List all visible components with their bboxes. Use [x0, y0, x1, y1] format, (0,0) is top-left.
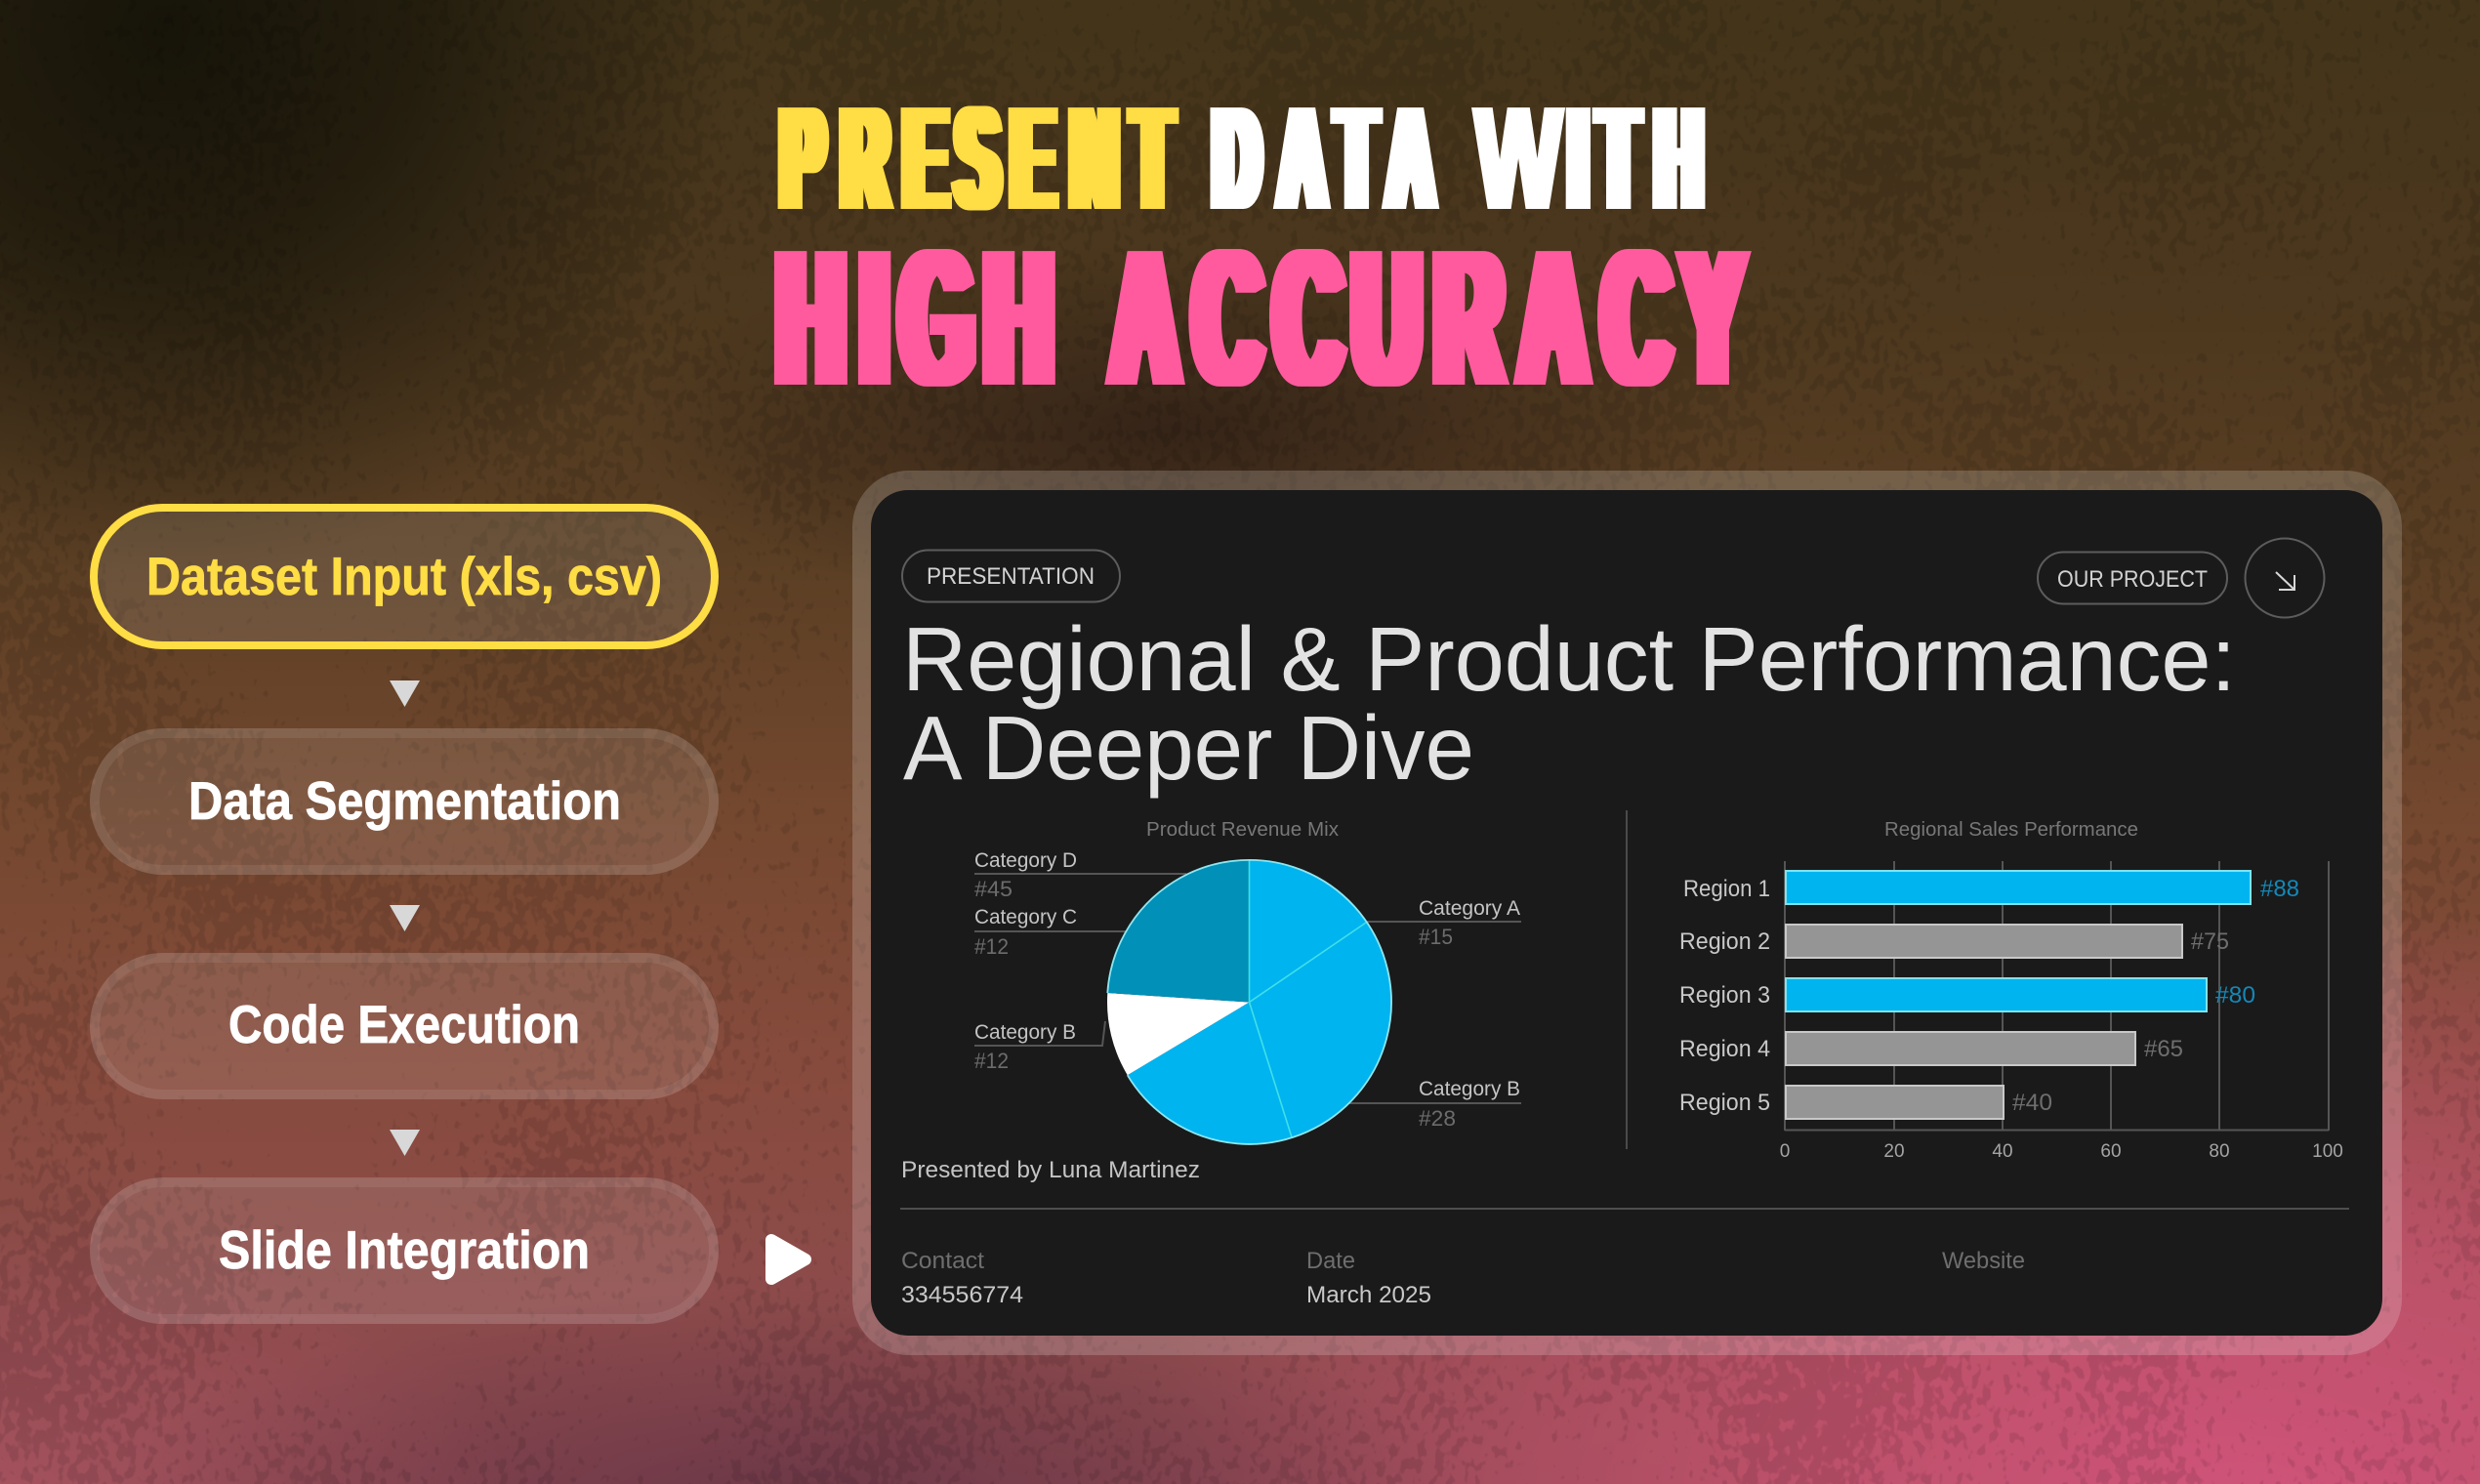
bar values: [2012, 876, 2299, 1116]
arrow down 1: [390, 680, 420, 707]
pie labels: Category A: [1419, 897, 1520, 920]
region labels: Region 2: [1679, 928, 1770, 955]
pie labels: #28: [1419, 1106, 1456, 1131]
x axis labels: 60: [2100, 1141, 2122, 1162]
bar chart grid: [1785, 861, 2329, 1131]
pie chart panel: [974, 819, 1521, 1144]
pie chart: [1107, 860, 1391, 1144]
pie labels: #12: [974, 934, 1009, 959]
icon: arrow in circle: [2246, 539, 2324, 617]
title line 2: ACCURACY: [1112, 209, 1743, 426]
footer: date: [1306, 1248, 1431, 1308]
pie labels: Category C: [974, 906, 1077, 928]
step 2: data segmentation: [95, 733, 714, 870]
step 1: dataset input: Dataset Input (xls, csv): [146, 546, 662, 606]
x axis labels: 100: [2312, 1141, 2343, 1162]
slide card frame: [852, 471, 2402, 1355]
footer: contact: [901, 1248, 1023, 1308]
slide heading: A Deeper Dive: [903, 697, 1474, 799]
bar chart title: Regional Sales Performance: [1884, 819, 2138, 841]
footer: date: March 2025: [1306, 1282, 1431, 1308]
x axis labels: 80: [2209, 1141, 2230, 1162]
pie labels: [974, 849, 1520, 1131]
pie labels: #45: [974, 877, 1013, 901]
footer: website: Website: [1942, 1248, 2025, 1274]
slide heading: Regional & Product Performance:: [902, 608, 2236, 710]
region labels: [1679, 876, 1770, 1116]
region labels: Region 5: [1679, 1090, 1770, 1116]
title: [778, 75, 1743, 426]
title line 1: DATA: [1214, 76, 1433, 240]
pie labels: #15: [1419, 925, 1453, 949]
bar values: #75: [2191, 928, 2229, 955]
title line 1: PRESENT: [781, 76, 1172, 240]
title line 2: [778, 209, 1743, 426]
bar chart panel: [1679, 819, 2343, 1162]
slide card: [871, 490, 2382, 1336]
x axis labels: 40: [1992, 1141, 2013, 1162]
step 2: data segmentation: Data Segmentation: [188, 770, 621, 831]
step 3: code execution: Code Execution: [228, 994, 580, 1054]
step 4: slide integration: Slide Integration: [219, 1219, 590, 1280]
slide heading: [902, 608, 2236, 799]
arrow down 3: [390, 1130, 420, 1156]
title line 1: [781, 75, 1702, 240]
workflow steps: [94, 508, 715, 1319]
bars: [1786, 871, 2251, 1119]
chart divider: [1626, 810, 1628, 1149]
arrow to slide: [771, 1240, 806, 1279]
arrow down 2: [390, 905, 420, 931]
pie chart title: Product Revenue Mix: [1146, 819, 1339, 841]
x axis labels: [1780, 1141, 2343, 1162]
region labels: Region 4: [1679, 1036, 1770, 1062]
presentation tag: PRESENTATION: [927, 563, 1095, 590]
title line 1: W: [1475, 75, 1562, 240]
our project tag: OUR PROJECT: [2057, 566, 2208, 593]
bar values: #40: [2012, 1090, 2052, 1116]
bar values: #65: [2144, 1036, 2183, 1062]
x axis labels: 0: [1780, 1141, 1790, 1162]
bar values: #88: [2260, 876, 2299, 902]
pie labels: #12: [974, 1049, 1009, 1073]
presenter line: Presented by Luna Martinez: [901, 1157, 1200, 1183]
footer: contact: 334556774: [901, 1282, 1023, 1308]
x axis labels: 20: [1883, 1141, 1905, 1162]
step 1: dataset input: [94, 508, 715, 645]
footer: contact: Contact: [901, 1248, 984, 1274]
title line 2: HIGH: [778, 209, 1052, 426]
presentation tag: [902, 551, 1120, 601]
footer divider: [900, 1208, 2349, 1210]
pie labels: Category B: [974, 1021, 1076, 1044]
region labels: Region 1: [1683, 876, 1770, 902]
step 4: slide integration: [95, 1182, 714, 1319]
step 3: code execution: [95, 958, 714, 1094]
our project tag: [2038, 553, 2227, 603]
footer: date: Date: [1306, 1248, 1355, 1274]
region labels: Region 3: [1679, 982, 1770, 1009]
pie labels: Category D: [974, 849, 1077, 872]
pie leader lines: [974, 874, 1521, 1103]
pie labels: Category B: [1419, 1078, 1520, 1100]
bar values: #80: [2215, 982, 2255, 1009]
